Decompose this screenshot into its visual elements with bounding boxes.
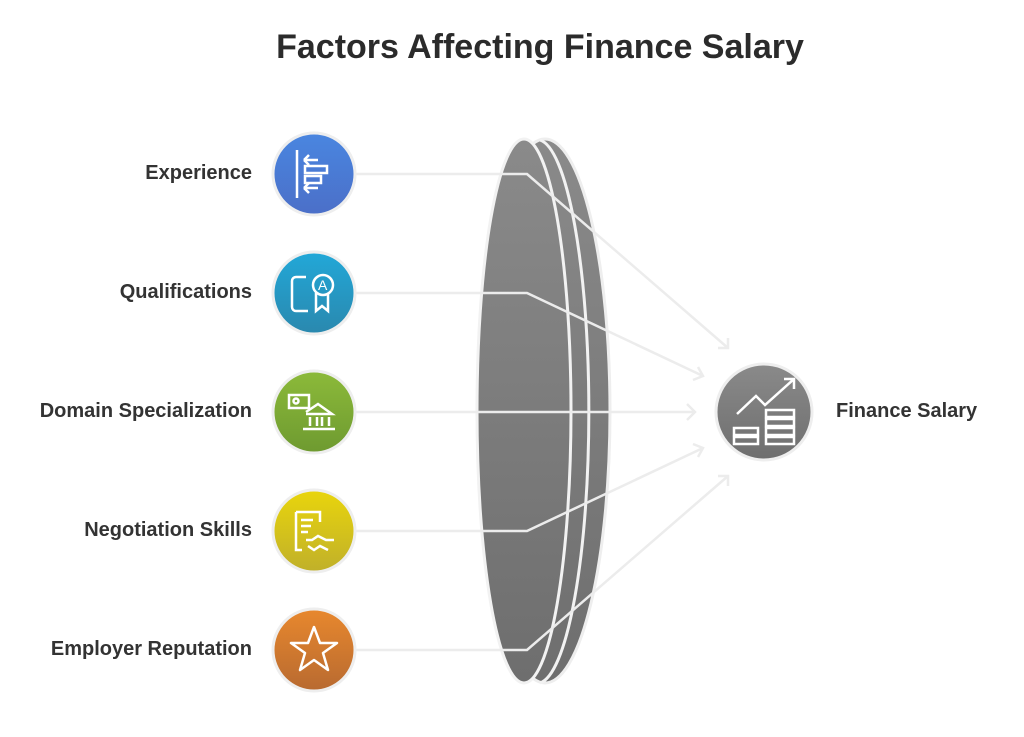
icon circle: domain specialization — [273, 371, 355, 453]
label: Experience: Experience — [145, 162, 252, 184]
label: Domain Specialization: Domain Specialization — [40, 400, 252, 422]
connector lines — [355, 174, 728, 650]
title: Factors Affecting Finance Salary — [276, 28, 804, 66]
lens — [477, 139, 610, 683]
icon circle: experience — [273, 133, 355, 215]
label: Qualifications: Qualifications — [120, 281, 252, 303]
label: Negotiation Skills: Negotiation Skills — [84, 519, 252, 541]
label: Employer Reputation: Employer Reputation — [51, 638, 252, 660]
icon circle: qualifications: A — [318, 277, 328, 293]
icon circle: employer reputation — [273, 609, 355, 691]
icon circle: qualifications — [273, 252, 355, 334]
icon circle: finance salary — [716, 364, 812, 460]
icon circle: negotiation skills — [273, 490, 355, 572]
label: Finance Salary: Finance Salary — [836, 400, 977, 422]
